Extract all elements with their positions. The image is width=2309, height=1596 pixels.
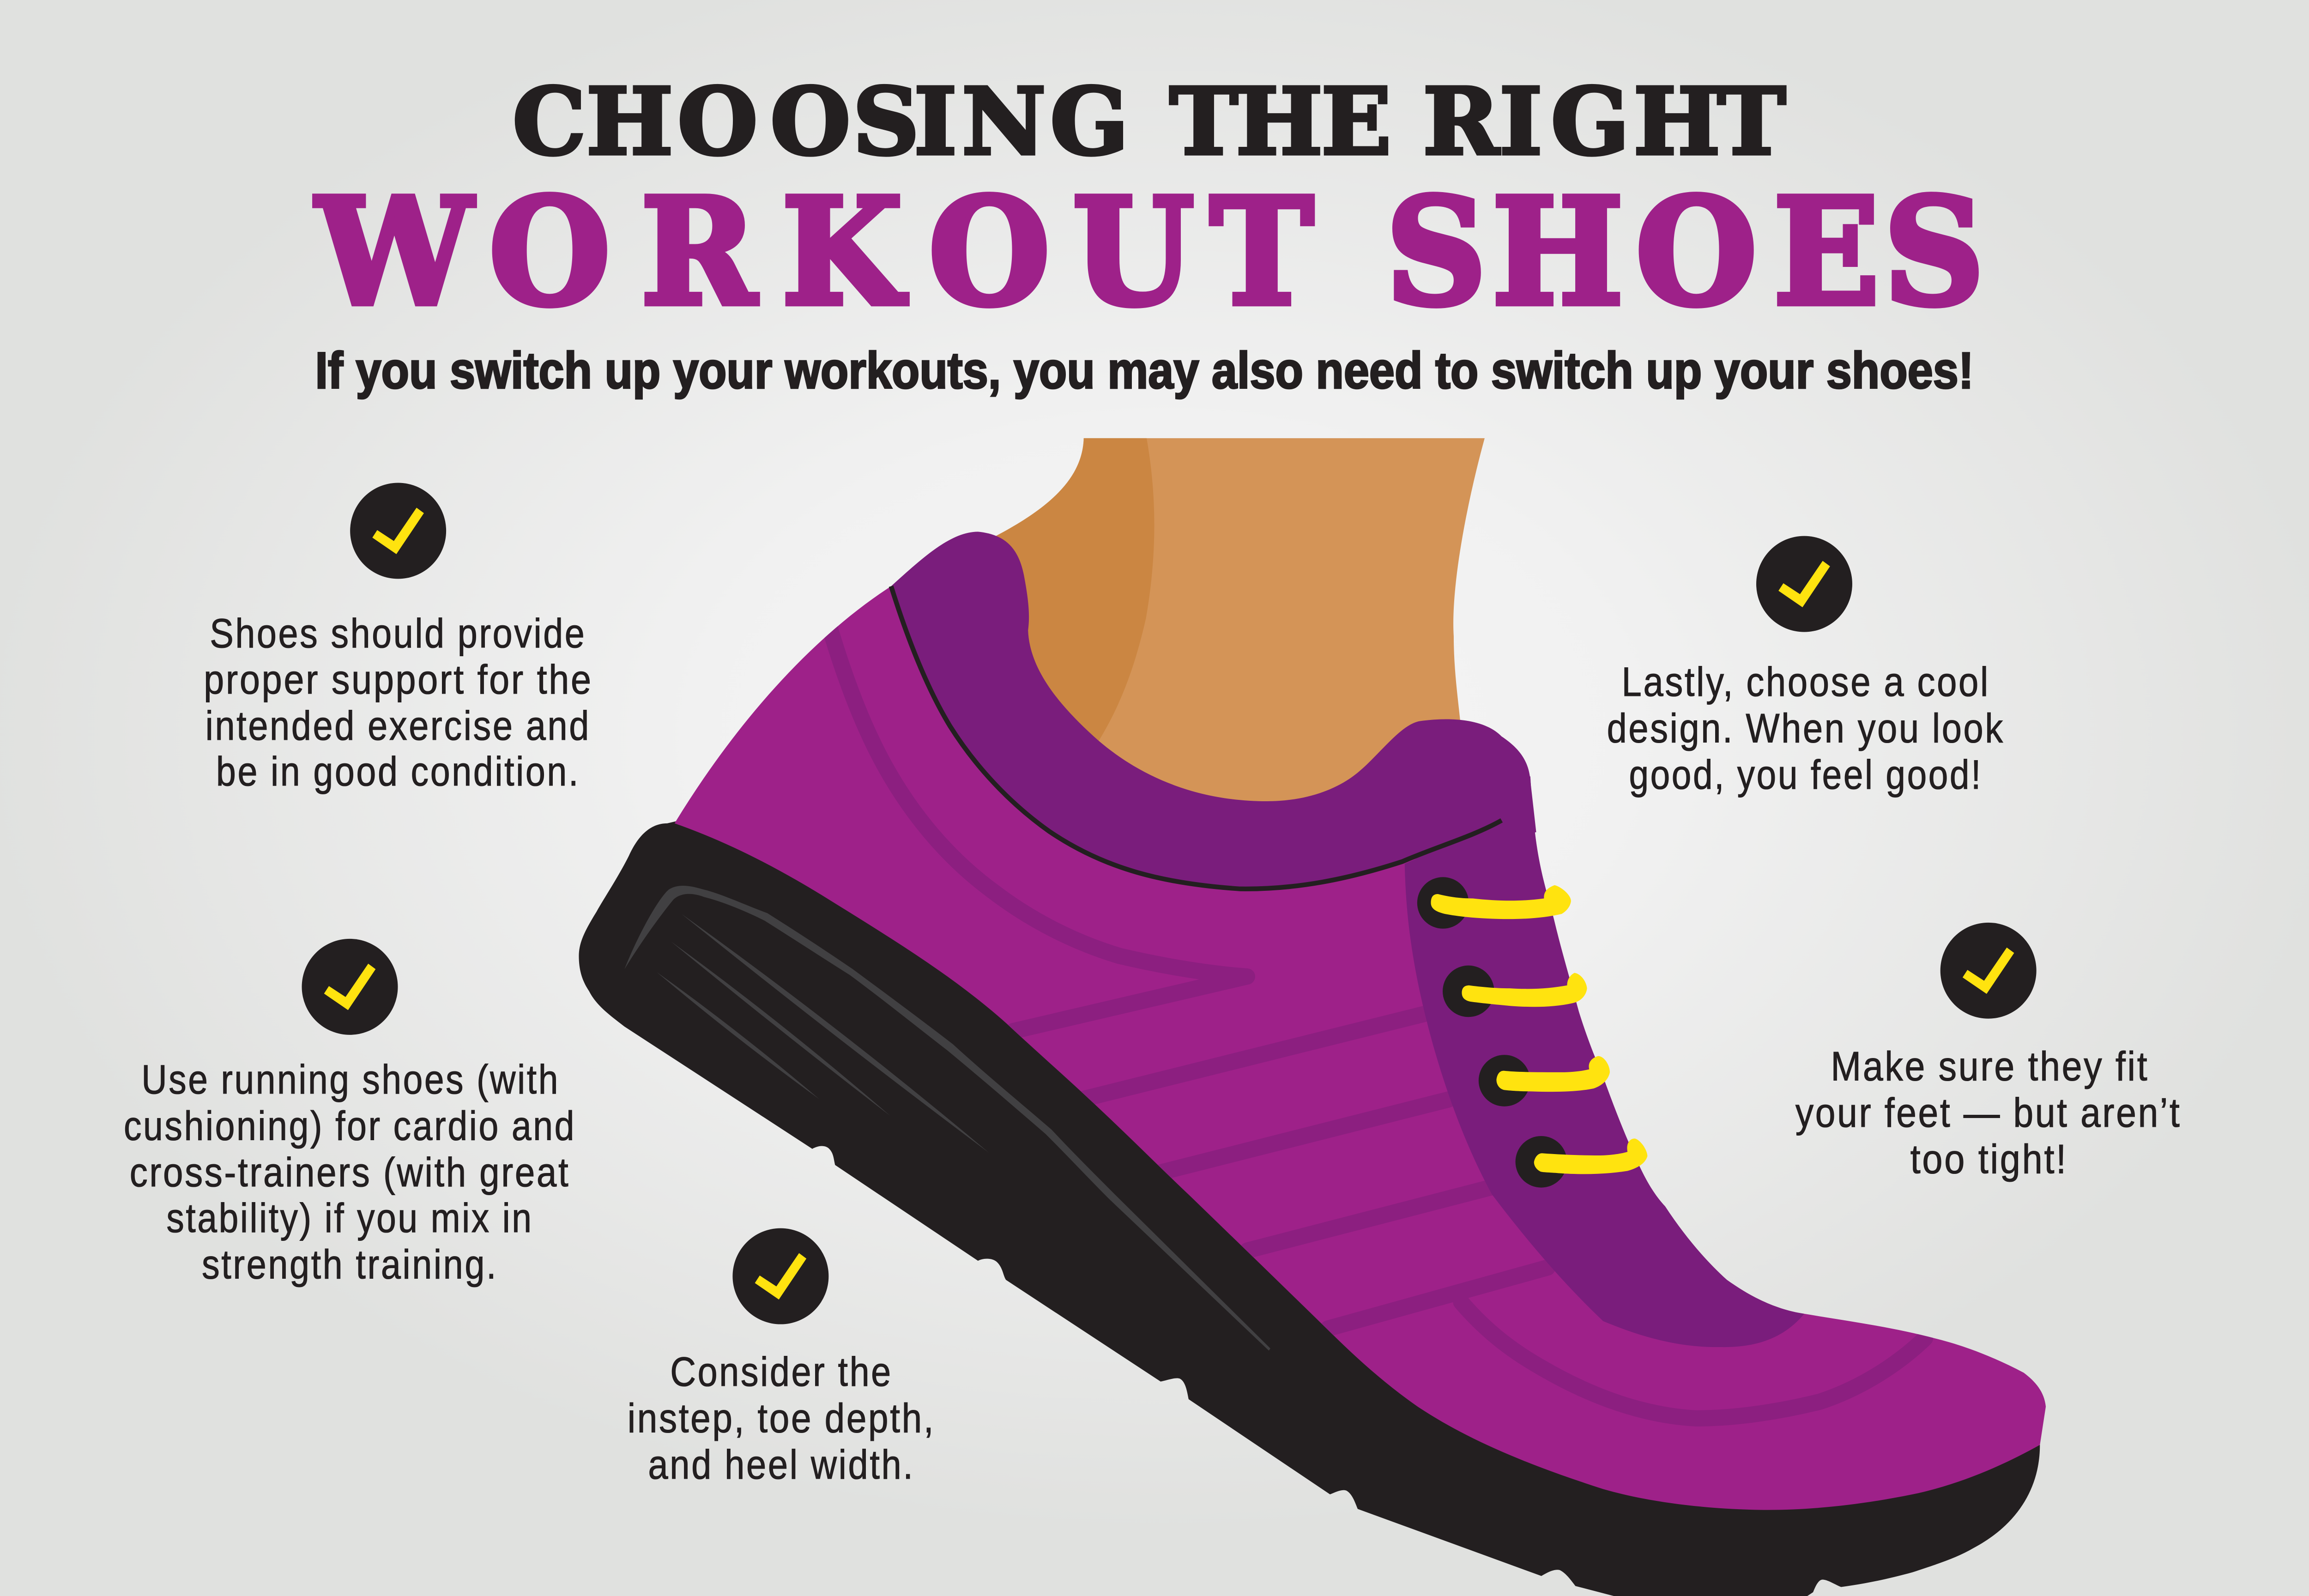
text: shoe type: stability) if you mix in bbox=[166, 1195, 533, 1241]
text: support: be in good condition. bbox=[216, 748, 580, 794]
text: shoe type: cushioning) for cardio and bbox=[124, 1103, 576, 1149]
tip: running shoes and cross-trainers bbox=[124, 939, 576, 1287]
icon: check mark bbox=[732, 1228, 828, 1324]
text: shoe type: Use running shoes (with bbox=[141, 1056, 560, 1102]
subtitle: If you switch up your workouts, you may also need to switch up your shoes! bbox=[315, 341, 1974, 399]
title: workout shoes: WORKOUT SHOES bbox=[314, 166, 1984, 338]
text: support: Shoes should provide bbox=[210, 610, 586, 656]
icon: check mark bbox=[1756, 536, 1852, 632]
text: instep: instep, toe depth, bbox=[628, 1395, 935, 1441]
collar seam line bbox=[891, 586, 1502, 889]
tip: instep and toe depth bbox=[628, 1228, 935, 1487]
shoe sole bbox=[579, 817, 2040, 1596]
text: shoe type: cross-trainers (with great bbox=[130, 1149, 570, 1195]
text: design bbox=[1607, 659, 2005, 798]
icon: check mark bbox=[302, 939, 398, 1035]
text: fit bbox=[1795, 1043, 2181, 1182]
tip: cool design bbox=[1607, 536, 2005, 798]
shoe collar bbox=[891, 532, 1536, 889]
laces bbox=[1431, 885, 1647, 1174]
text: instep: and heel width. bbox=[648, 1441, 915, 1487]
text: instep bbox=[628, 1348, 935, 1487]
text: support bbox=[204, 610, 593, 794]
illustration: leg and running shoe bbox=[579, 438, 2046, 1596]
text: design: Lastly, choose a cool bbox=[1622, 659, 1990, 705]
text: instep: Consider the bbox=[670, 1348, 893, 1395]
text: design: good, you feel good! bbox=[1629, 751, 1983, 798]
icon: check mark bbox=[350, 483, 446, 579]
tip: fit bbox=[1795, 923, 2181, 1182]
text: shoe type bbox=[124, 1056, 576, 1287]
icon: check mark bbox=[1940, 923, 2037, 1019]
leg bbox=[996, 438, 1485, 825]
text: fit: Make sure they fit bbox=[1831, 1043, 2149, 1089]
text: design: design. When you look bbox=[1607, 705, 2005, 751]
lace band bbox=[1405, 776, 1804, 1347]
tip: support and condition bbox=[204, 483, 593, 794]
text: fit: too tight! bbox=[1910, 1136, 2068, 1182]
text: shoe type: strength training. bbox=[202, 1241, 498, 1287]
text: support: proper support for the bbox=[204, 656, 593, 702]
text: fit: your feet — but aren’t bbox=[1795, 1089, 2181, 1136]
eyelets bbox=[1417, 877, 1567, 1188]
shoe upper bbox=[675, 586, 2046, 1510]
text: support: intended exercise and bbox=[206, 702, 591, 749]
title: choosing the right: CHOOSING THE RIGHT bbox=[513, 68, 1786, 176]
